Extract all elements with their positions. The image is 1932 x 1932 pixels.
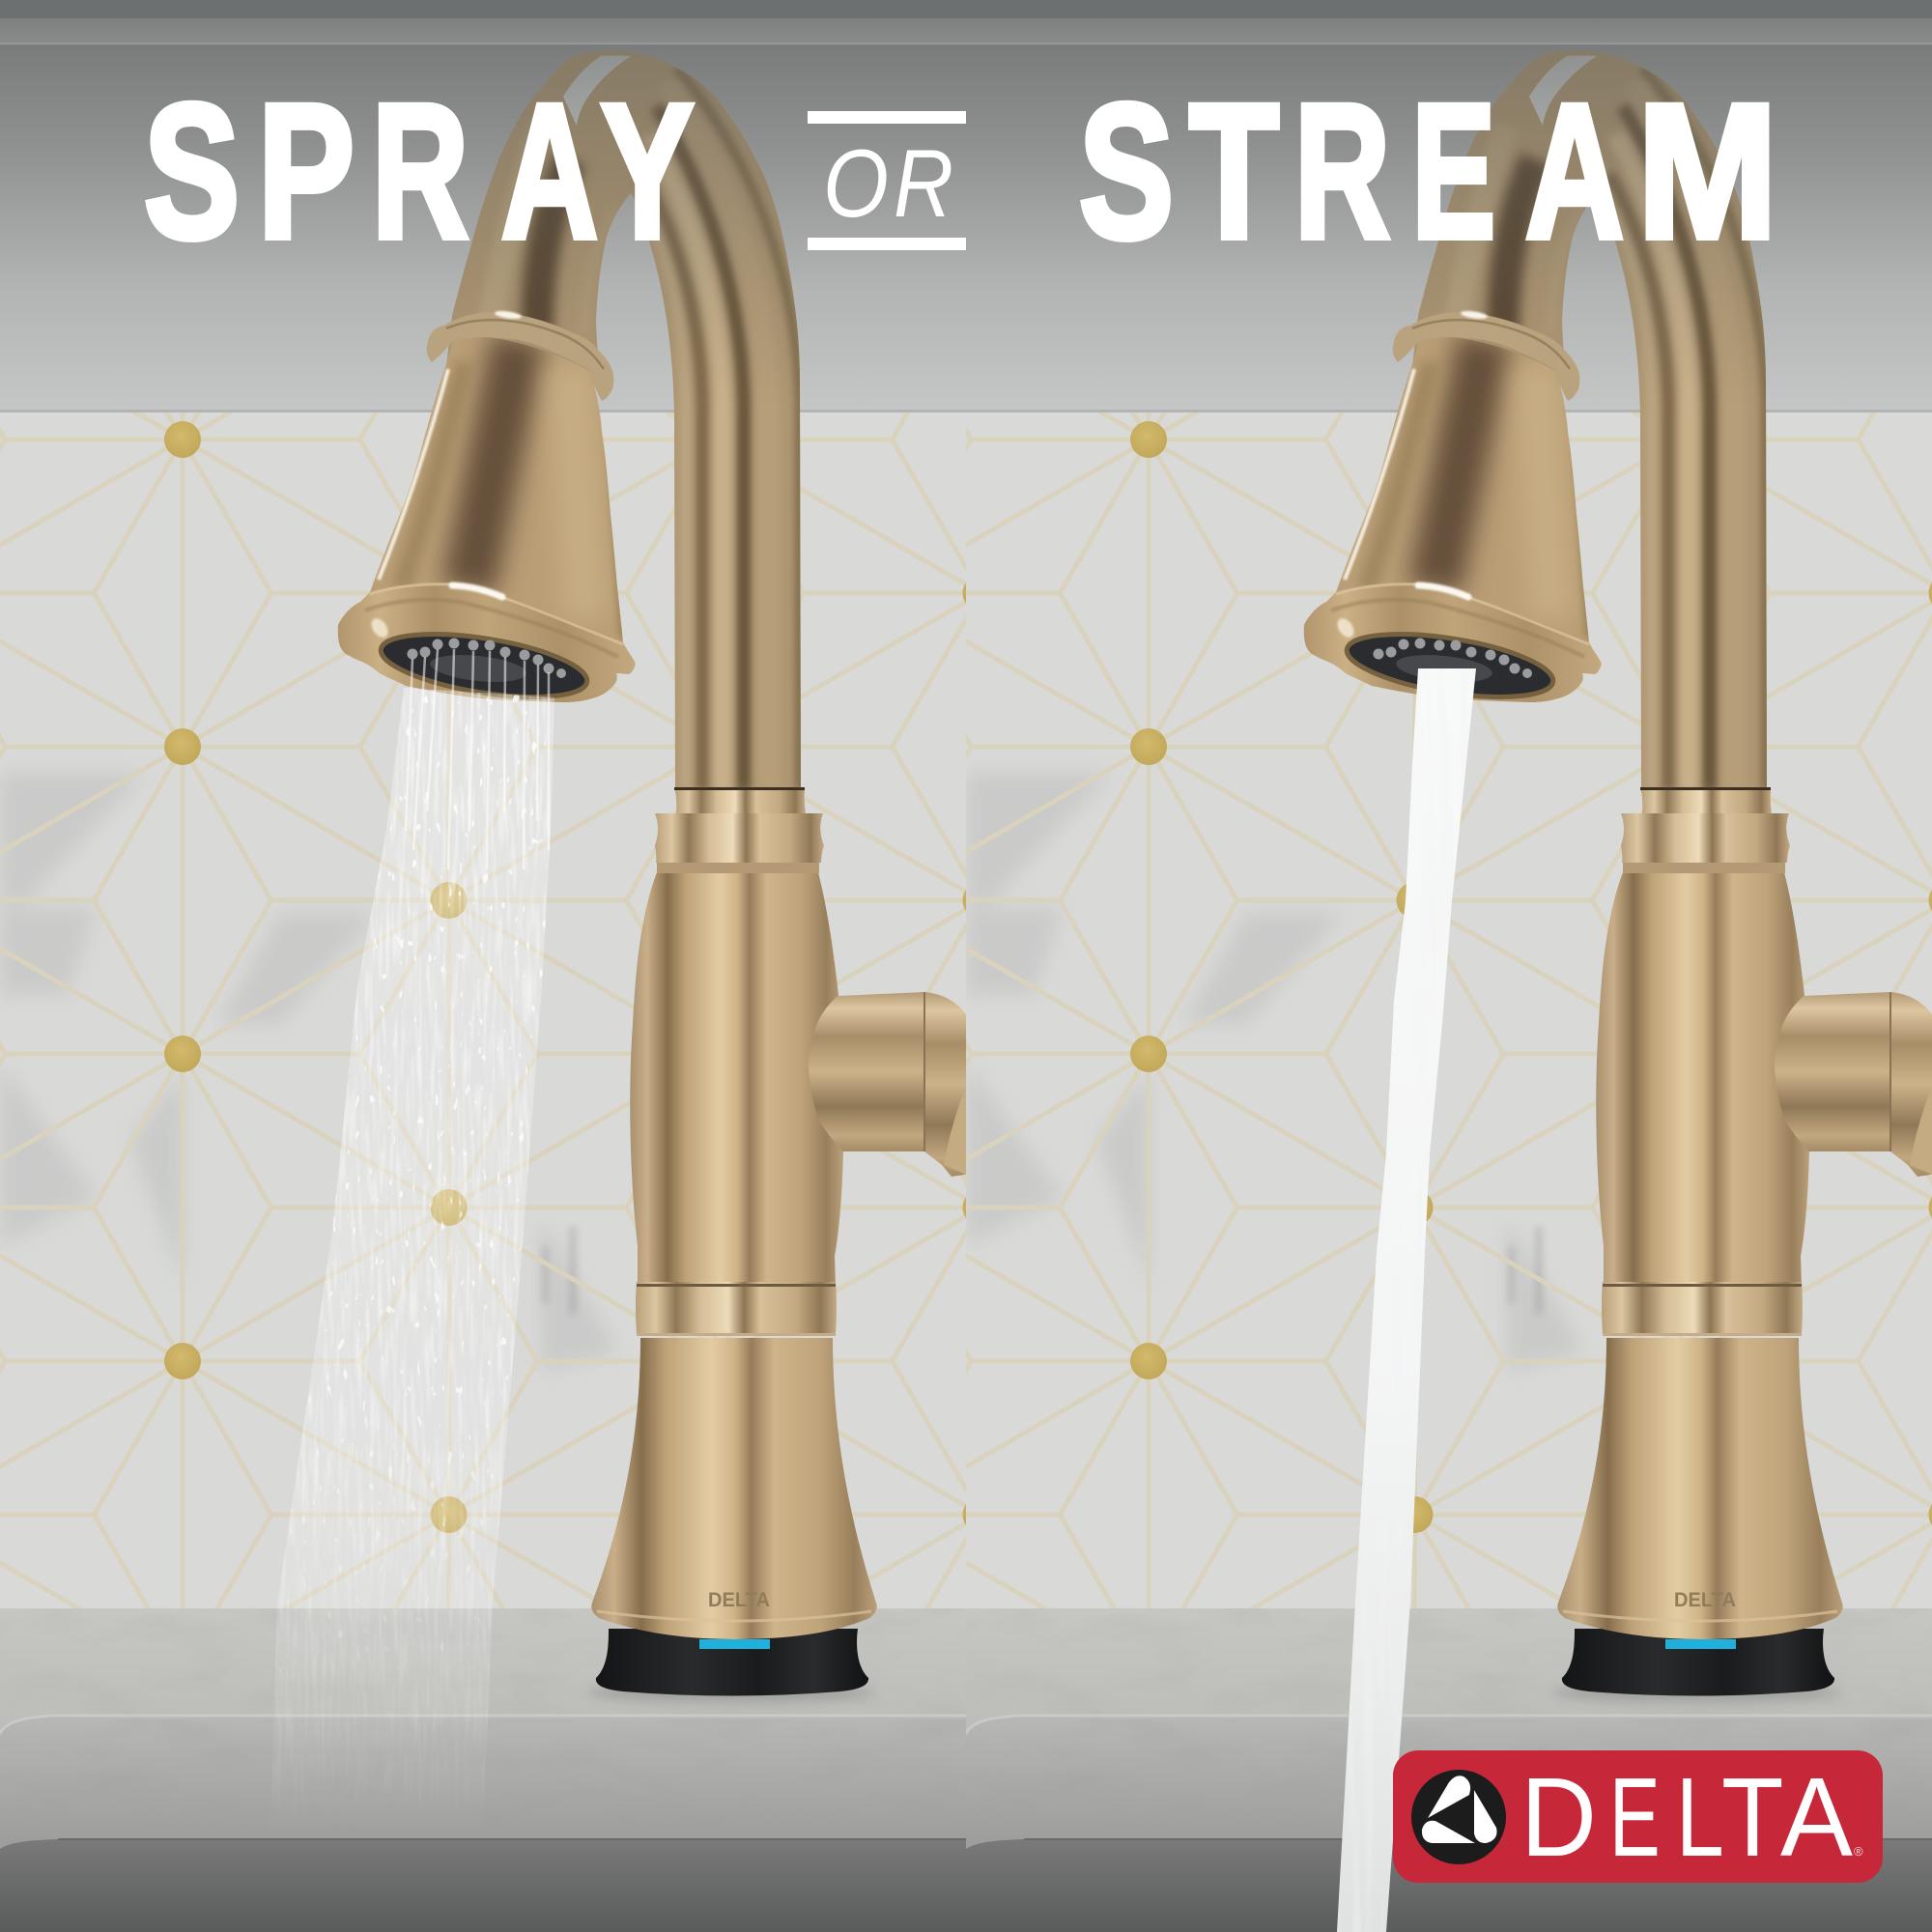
title word: SPRAY: S — [144, 64, 240, 278]
wordmark: DELTA: A — [1780, 1754, 1854, 1880]
title word: STREAM: S — [1079, 64, 1174, 278]
faucet and tiled kitchen scene — [0, 0, 971, 1932]
faucet and tiled kitchen scene — [966, 0, 1932, 1932]
title word: STREAM: R — [1294, 64, 1390, 278]
water: spray pattern — [270, 649, 554, 1835]
registered mark: ® — [1854, 1844, 1863, 1859]
title word: STREAM: A — [1525, 64, 1624, 278]
title word: SPRAY: P — [258, 64, 355, 278]
title connector: OR with rules — [808, 111, 966, 250]
title connector: OR with rules: R — [894, 129, 953, 237]
panel: spray side — [0, 0, 971, 1932]
title connector: OR with rules: O — [823, 129, 889, 237]
title word: STREAM: E — [1412, 64, 1495, 278]
title word: STREAM: T — [1189, 64, 1279, 278]
title word: SPRAY: R — [372, 64, 469, 278]
title word: SPRAY: A — [501, 64, 598, 278]
wordmark: DELTA: E — [1609, 1754, 1661, 1880]
title word: STREAM: M — [1637, 64, 1777, 278]
wordmark: DELTA: T — [1721, 1754, 1783, 1880]
logo: Delta badge — [1393, 1750, 1883, 1883]
wordmark: DELTA: D — [1520, 1754, 1597, 1880]
title word: SPRAY: Y — [601, 64, 694, 278]
water: solid stream — [1337, 668, 1476, 1932]
wordmark: DELTA: L — [1676, 1754, 1724, 1880]
icon: Delta triangle mark — [1411, 1770, 1506, 1864]
panel: stream side — [966, 0, 1932, 1932]
